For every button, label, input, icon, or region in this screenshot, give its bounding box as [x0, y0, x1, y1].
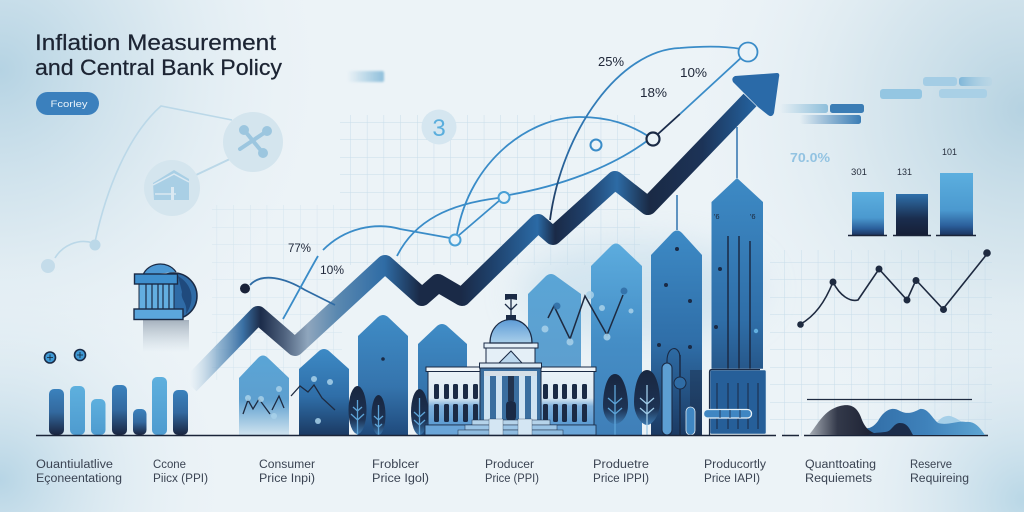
tiny marks on tall bar — [714, 212, 756, 221]
icon: tools — [223, 112, 283, 172]
steps — [425, 419, 596, 435]
label: core price index: Ccone — [153, 459, 186, 471]
label: productivity price index: Price IAPI) — [704, 473, 760, 485]
right-side towers — [662, 349, 702, 435]
label: core price index — [153, 459, 208, 485]
mini bar chart — [790, 147, 976, 236]
label: producer price index 2: Price (PPI) — [485, 473, 539, 485]
faint policy network — [41, 106, 232, 273]
label: consumer price index: Price Inpi) — [259, 473, 315, 485]
baseline axis — [36, 434, 988, 436]
label: consumer price index — [259, 459, 315, 485]
bottom category labels — [36, 459, 969, 485]
right dash fragments — [780, 77, 992, 124]
label: producer price index 3: Price IPPI) — [593, 473, 649, 485]
tall bar instrument columns — [704, 236, 766, 435]
label: productivity price index — [704, 459, 766, 485]
label: consumer price index: Consumer — [259, 459, 315, 471]
central bank building — [425, 294, 596, 435]
sparklines on bars — [243, 295, 623, 414]
area chart — [807, 400, 985, 435]
rising trend curves — [250, 47, 743, 319]
tag pill — [36, 92, 99, 115]
title — [35, 30, 283, 80]
dome and flag — [490, 294, 532, 343]
tag pill: Fcorley — [50, 99, 88, 110]
mini bar chart: 70.0% — [790, 150, 830, 165]
mini bar chart: 131 — [897, 167, 912, 177]
label: producer price index 1: Froblcer — [372, 459, 419, 471]
background grid: centre — [340, 115, 640, 265]
building windows — [434, 384, 587, 422]
label: quantitative easing: Ouantiulatlive — [36, 459, 113, 471]
label: reserve requirements: Reserve — [910, 459, 952, 471]
label: producer price index 3: Produetre — [593, 459, 649, 471]
label: quantitative requirements — [805, 459, 876, 485]
label: producer price index 1: Price Igol) — [372, 473, 429, 485]
mini bar chart: 301 — [851, 167, 867, 177]
title: and Central Bank Policy — [35, 55, 283, 80]
percentage labels: 10% — [320, 265, 344, 277]
percentage labels: 77% — [288, 243, 311, 255]
percentage labels: 18% — [640, 86, 667, 100]
trees — [348, 370, 660, 435]
tiny marks on tall bar: '6 — [714, 212, 720, 221]
label: quantitative easing — [36, 459, 122, 485]
label: quantitative requirements: Requiemets — [805, 473, 872, 485]
label: productivity price index: Producortly — [704, 459, 766, 471]
label: reserve requirements: Requireing — [910, 473, 969, 485]
label: producer price index 3 — [593, 459, 649, 485]
label: core price index: Piicx (PPI) — [153, 473, 208, 485]
icon: house — [144, 160, 200, 216]
label: quantitative easing: Eçoneentationg — [36, 473, 122, 485]
connector stems — [677, 127, 737, 230]
label: producer price index 1 — [372, 459, 429, 485]
tiny marks on tall bar: '6 — [750, 212, 756, 221]
background grid: right — [770, 250, 992, 436]
dots on bars — [381, 247, 758, 361]
label: producer price index 2 — [485, 459, 539, 485]
percentage labels — [288, 55, 707, 277]
label: reserve requirements — [910, 459, 969, 485]
portico — [480, 368, 541, 422]
label: producer price index 2: Producer — [485, 459, 534, 471]
blurred dash fragment — [347, 71, 384, 82]
icon: plus markers — [44, 350, 86, 363]
line chart — [797, 249, 991, 328]
background grid: left — [212, 205, 342, 380]
label: quantitative requirements: Quanttoating — [805, 459, 876, 471]
pentagon bars — [239, 178, 763, 435]
icon: bank and globe — [134, 264, 197, 352]
percentage labels: 25% — [598, 55, 624, 69]
numbered badge: 3 — [432, 115, 446, 142]
mini bar chart: 101 — [942, 147, 957, 157]
numbered badge — [422, 110, 456, 144]
soft glow behind tall bars — [520, 240, 760, 340]
trend markers — [240, 42, 758, 294]
left bar chart — [49, 377, 188, 435]
main rising arrow — [190, 73, 779, 385]
title: Inflation Measurement — [35, 30, 277, 55]
sparkline markers — [245, 288, 634, 424]
percentage labels: 10% — [680, 65, 707, 80]
